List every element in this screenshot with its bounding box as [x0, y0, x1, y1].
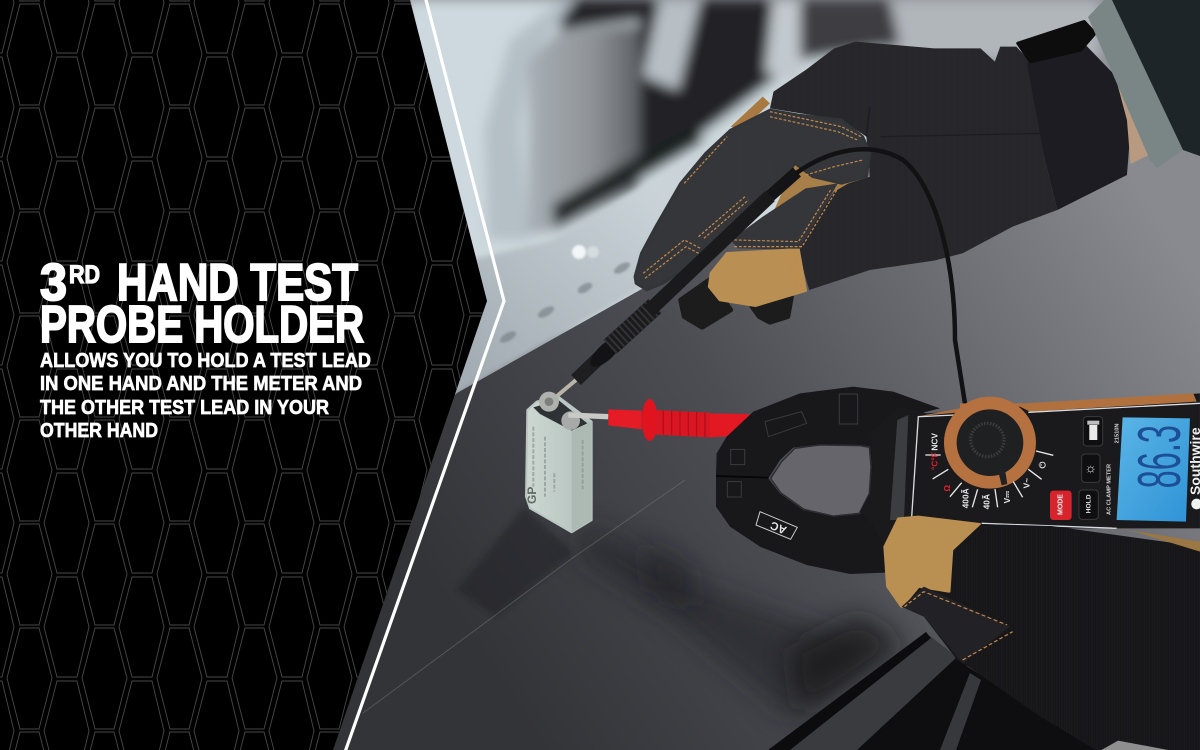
tan thumb tip	[709, 250, 806, 306]
photo: workshop background	[400, 0, 1200, 750]
LCD display	[1117, 417, 1193, 522]
knit glove body	[902, 524, 1200, 750]
body side grip	[890, 415, 908, 520]
meter model text	[1107, 423, 1121, 515]
knit back of glove	[770, 42, 1057, 290]
gloved fingers underneath	[681, 280, 731, 327]
tan palm	[774, 163, 870, 212]
dial labels: Ω	[942, 485, 952, 492]
grey thumb	[731, 183, 838, 250]
dial labels: V~	[1021, 478, 1031, 488]
hold button: HOLD	[1086, 494, 1093, 513]
title: PROBE HOLDER	[40, 296, 364, 354]
description text: IN ONE HAND AND THE METER AND	[40, 372, 362, 395]
battery print lines	[533, 427, 583, 497]
battery	[525, 392, 592, 532]
grey index finger	[635, 110, 870, 290]
description text: ALLOWS YOU TO HOLD A TEST LEAD	[40, 349, 371, 372]
dial labels: V⎓	[1002, 491, 1012, 503]
meter model text: AC CLAMP METER	[1107, 464, 1113, 515]
lower hand: work glove	[885, 517, 1200, 750]
table surface	[300, 100, 1200, 750]
jaw opening	[771, 445, 871, 516]
mode button: MODE	[1058, 494, 1065, 515]
dial labels: °C°F	[929, 452, 939, 470]
LCD display: 86.3	[1126, 425, 1193, 488]
AC jaw label: AC	[769, 518, 788, 536]
jaw parting line	[716, 476, 768, 478]
white panel outline	[912, 403, 1200, 528]
red test probe	[568, 399, 750, 441]
tan palm patch	[885, 517, 979, 607]
clamp jaws	[716, 387, 940, 574]
table edge and frame	[768, 632, 1100, 750]
title: HAND TEST	[117, 254, 358, 312]
table crease	[363, 480, 685, 713]
clamp meter	[716, 387, 1200, 574]
battery label: GP	[525, 487, 539, 504]
dial labels: NCV	[929, 433, 939, 451]
shirt sleeve	[1112, 0, 1200, 156]
wrist skin	[1114, 73, 1152, 164]
tan wrist strip	[1096, 525, 1200, 552]
black test probe	[557, 172, 797, 396]
tan top strip	[920, 393, 1197, 416]
description text	[40, 349, 371, 442]
left black panel with hexagon pattern	[0, 0, 487, 750]
AC jaw label	[756, 512, 797, 539]
white chevron divider	[345, 0, 504, 750]
dial labels: ⏻	[1037, 461, 1047, 468]
blurred machinery behind the bench	[405, 0, 1100, 330]
backlight button: ☼	[1085, 461, 1097, 476]
dial labels: 400Ã	[961, 488, 971, 508]
bench highlight spot	[572, 245, 599, 259]
description text: OTHER HAND	[40, 419, 158, 442]
meter model text: 21510N	[1115, 423, 1121, 443]
light button	[1083, 417, 1103, 446]
dial labels	[929, 433, 1047, 509]
title: RD	[69, 261, 100, 289]
bench ruler markings	[498, 260, 632, 345]
glove logo patch	[1101, 741, 1168, 750]
tan knuckle patch	[731, 97, 770, 130]
silver bench surface	[440, 85, 800, 405]
dial tick marks	[925, 451, 1053, 507]
glove cuff	[1027, 43, 1131, 210]
glove seam	[866, 107, 1041, 137]
upper hand: work glove	[635, 22, 1152, 327]
title: 3	[40, 254, 67, 312]
glove stitching	[643, 112, 863, 290]
shirt sleeve cuff	[1088, 0, 1183, 168]
backlight button	[1082, 454, 1100, 482]
hold button	[1079, 490, 1098, 519]
black meter lead cable	[795, 149, 966, 410]
description text: THE OTHER TEST LEAD IN YOUR	[40, 396, 329, 419]
wrist strap	[1018, 22, 1095, 62]
title	[40, 254, 364, 354]
jaw marks	[727, 394, 858, 497]
grey side panel with stitching	[902, 587, 1010, 663]
meter body	[860, 393, 1200, 550]
mode button	[1050, 491, 1072, 520]
dial labels: 40Ã	[981, 494, 991, 509]
table shadows	[457, 507, 905, 717]
selector dial	[944, 397, 1036, 489]
